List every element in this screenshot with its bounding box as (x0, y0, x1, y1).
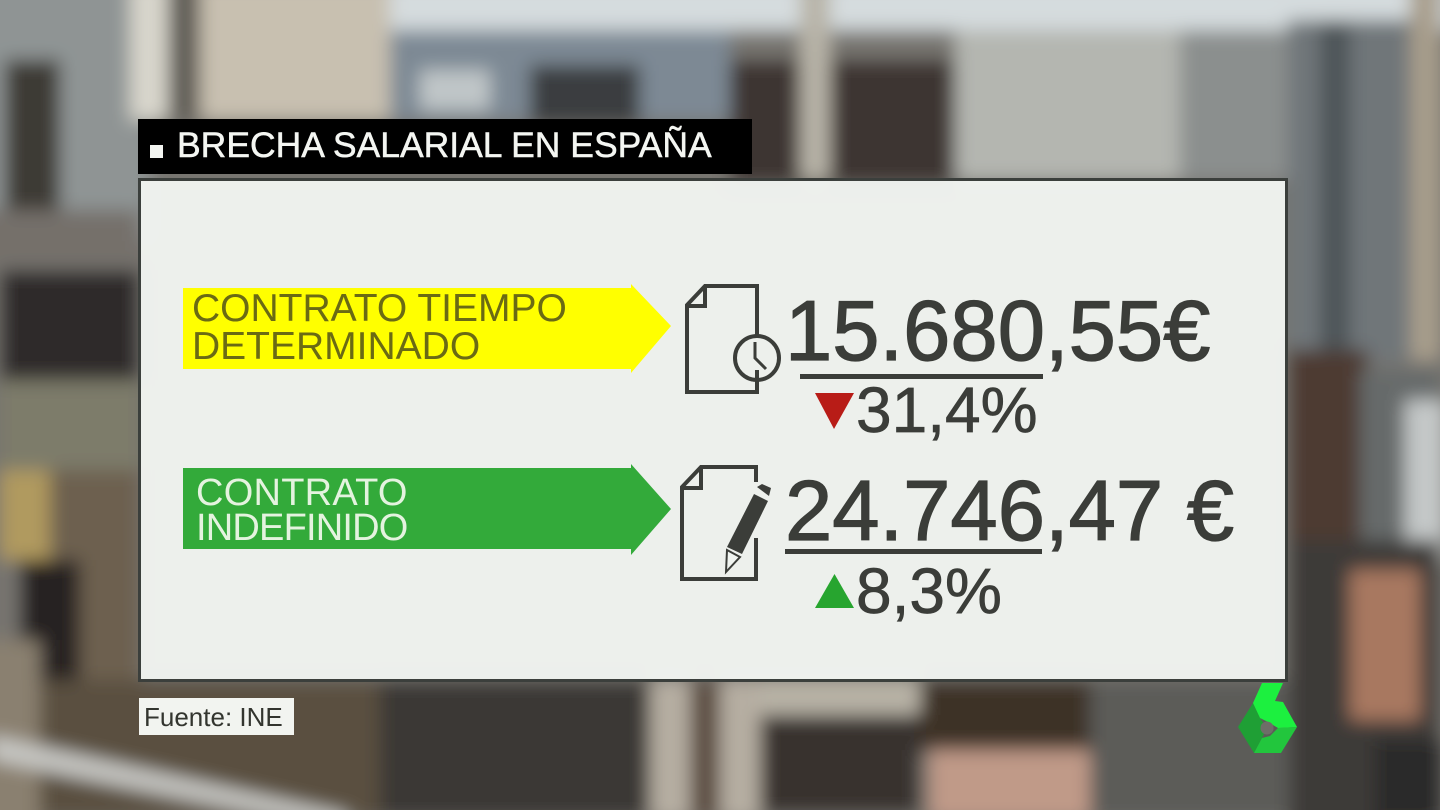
arrow label: contrato tiempo determinado (183, 284, 671, 373)
yellow arrow text: CONTRATO TIEMPO (192, 287, 567, 330)
icon: document with pencil (680, 465, 771, 581)
icon: red down triangle (815, 393, 854, 429)
source text: Fuente: INE (144, 702, 283, 732)
green arrow text: INDEFINIDO (196, 507, 408, 549)
yellow arrow text: DETERMINADO (192, 325, 480, 368)
arrow label: contrato indefinido (183, 464, 671, 555)
icon: green channel logo (1238, 683, 1297, 753)
yellow arrow text (192, 287, 567, 368)
icon: green up triangle (815, 574, 854, 608)
heading bullet (150, 145, 163, 158)
percentage: 31,4%: 31,4% (856, 374, 1037, 446)
heading bar (138, 119, 752, 174)
source label (139, 698, 294, 735)
green arrow (183, 464, 671, 555)
yellow arrow (183, 284, 671, 373)
heading text: BRECHA SALARIAL EN ESPAÑA (177, 125, 712, 165)
value: 24.746,47 €: 24.746,47 € (785, 464, 1234, 559)
green arrow text: CONTRATO (196, 472, 408, 514)
value: 15.680,55€: 15.680,55€ (785, 284, 1210, 379)
panel: contract salary comparison (138, 178, 1288, 682)
green arrow text (196, 472, 408, 549)
value underline (800, 374, 1043, 379)
percentage: 8,3%: 8,3% (856, 555, 1002, 627)
icon: document with clock (685, 284, 781, 394)
value underline (785, 549, 1042, 554)
